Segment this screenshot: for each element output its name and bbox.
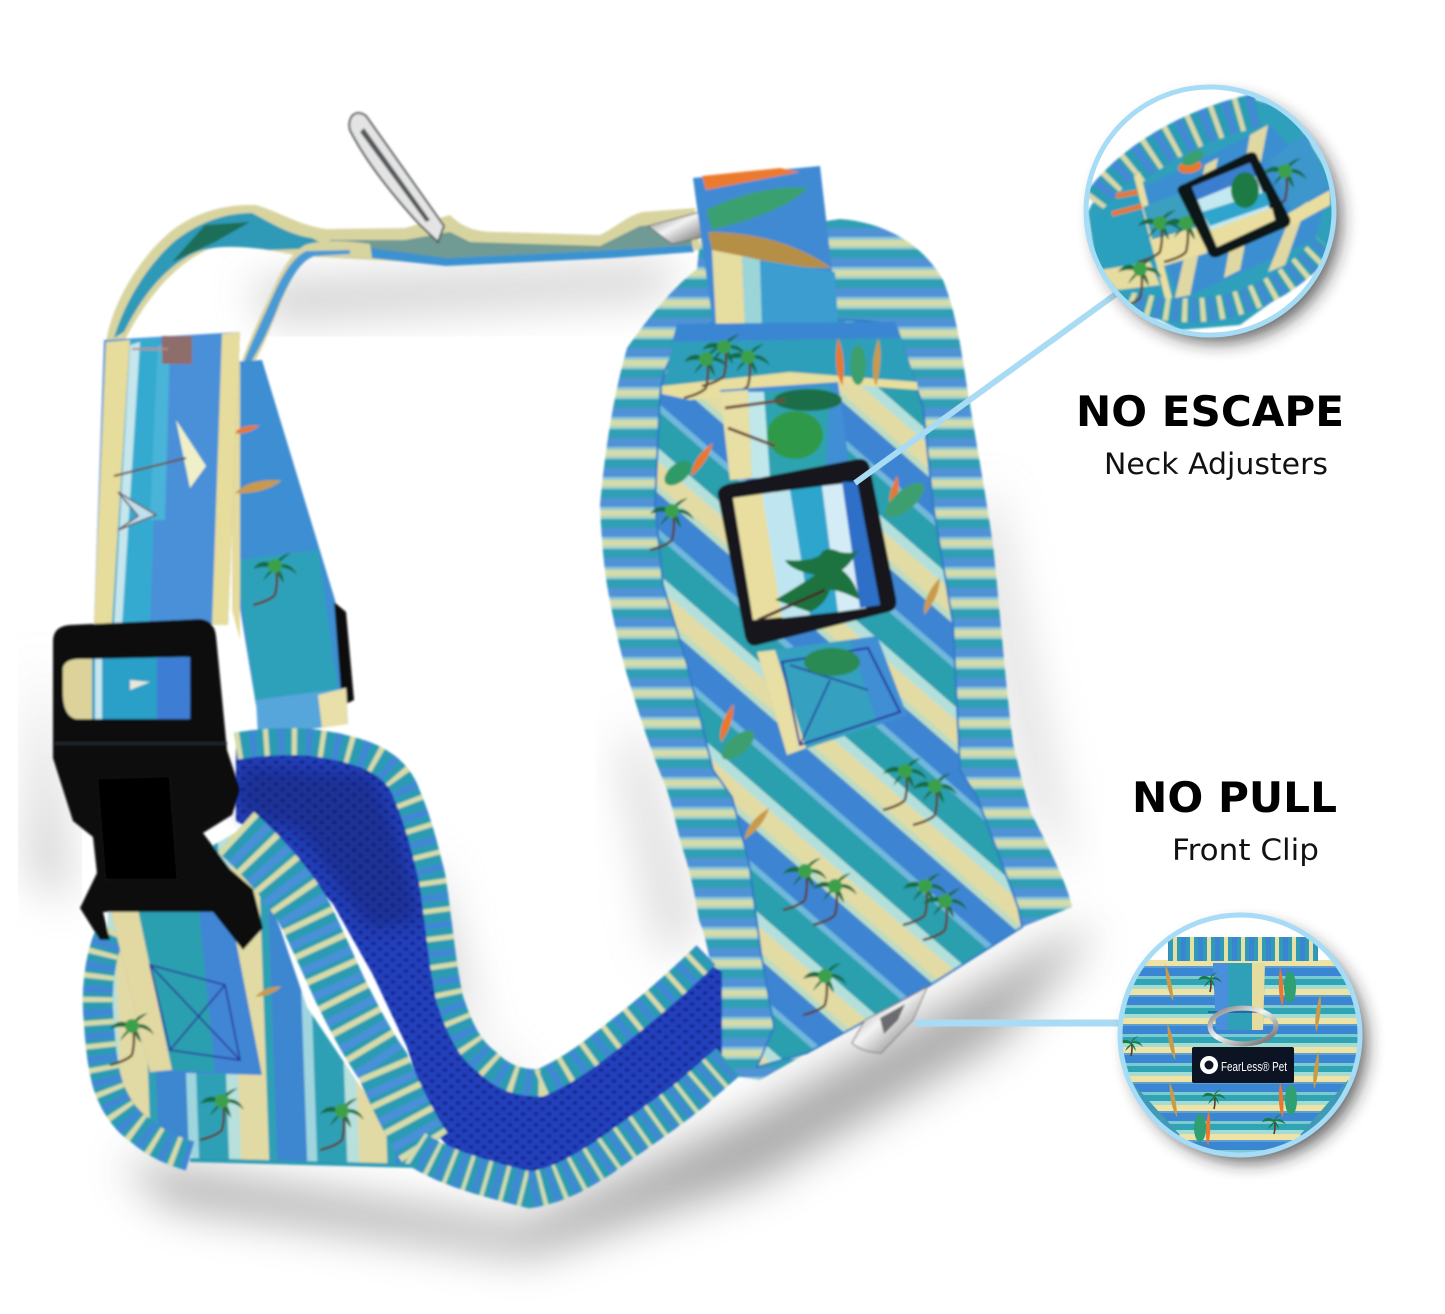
heading: no pull: NO PULL [1132,773,1337,822]
connector line: neck adjusters [855,294,1116,483]
drop shadow under harness [30,265,1095,1255]
front D-ring [852,987,927,1053]
connector line: front clip [915,1020,1122,1026]
piped fabric edges [98,742,728,1190]
left neck strap [94,332,354,736]
body fabric panel [655,320,1022,1067]
side release buckle [53,619,263,950]
lower neck strap [720,382,907,755]
brand tag: FearLess® Pet [1221,1060,1287,1074]
lower strap end on chest [108,900,262,1075]
horizontal keeper band [662,322,918,400]
heading: no escape: NO ESCAPE [1076,387,1344,436]
lower left lobe fabric [104,830,417,1165]
body palm trees and surfboards [650,441,967,1015]
slider buckle [718,459,896,646]
label: neck adjusters: Neck Adjusters [1104,447,1328,481]
mesh lining [236,740,722,1180]
detail circle: neck adjuster close-up [1086,87,1345,342]
harness product [53,113,1072,1190]
top straps and O-ring [106,113,708,378]
label: front clip: Front Clip [1172,833,1319,867]
panel rim (striped edge piping) [600,219,1072,1080]
brand tag [1192,1047,1294,1083]
mesh shading [240,765,420,930]
lobe palms [200,985,364,1150]
detail circle: front clip close-up [1115,915,1366,1165]
neck strap with surfboards [693,166,838,325]
